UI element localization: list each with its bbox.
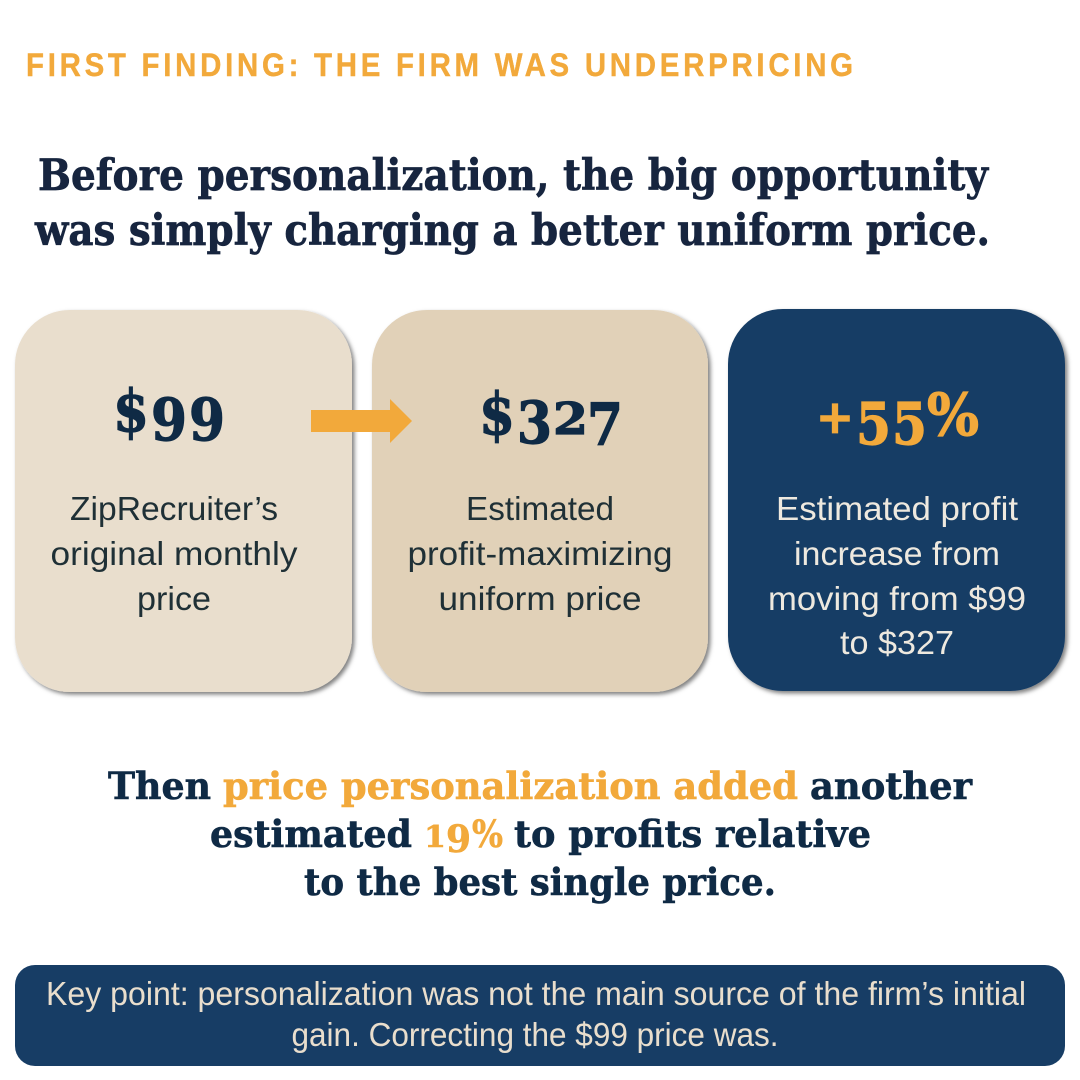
panel: profit increase xyxy=(728,309,1065,691)
key point text: Key point: personalization was not the main source of the firm’s initial xyxy=(46,975,1026,1012)
title: FIRST FINDING: THE FIRM WAS UNDERPRICING xyxy=(26,47,853,83)
heading xyxy=(34,151,990,256)
stat: +55% xyxy=(816,381,979,458)
personalization statement: another xyxy=(810,764,972,808)
description: profit-maximizing price xyxy=(408,490,672,617)
description: profit-maximizing price: profit-maximizing xyxy=(408,535,672,572)
stat: $99: $ xyxy=(113,377,149,445)
personalization statement: 1 xyxy=(424,820,446,855)
stat: $99: 9 xyxy=(189,386,225,454)
stat: +55%: 5 xyxy=(892,390,927,458)
description: original price: original monthly xyxy=(50,535,298,572)
description: profit increase: Estimated profit xyxy=(776,490,1018,527)
personalization statement: % xyxy=(472,812,503,856)
heading: was simply charging a better uniform price. xyxy=(34,206,990,256)
description: original price: price xyxy=(137,580,211,617)
heading: Before personalization, the big opportunity xyxy=(38,151,990,201)
personalization statement: price personalization added xyxy=(223,764,798,808)
personalization statement xyxy=(108,764,972,904)
personalization statement: to profits relative xyxy=(514,812,871,856)
key point text: gain. Correcting the $99 price was. xyxy=(292,1016,778,1053)
description: profit increase: increase from xyxy=(794,535,1000,572)
personalization statement: to the best single price. xyxy=(304,860,776,904)
description: profit increase: moving from $99 xyxy=(768,580,1026,617)
stat: +55%: % xyxy=(927,381,979,449)
key point banner xyxy=(15,965,1065,1066)
panel: original price xyxy=(15,310,352,692)
personalization statement: estimated xyxy=(210,812,412,856)
stat: $327: 7 xyxy=(587,391,623,459)
personalization statement: 9 xyxy=(446,817,471,861)
stat: +55%: 5 xyxy=(856,390,891,458)
stat: $99 xyxy=(113,377,225,454)
arrow xyxy=(311,399,412,443)
stat: +55%: + xyxy=(816,390,854,444)
stat: $327 xyxy=(479,380,623,459)
stat: $327: 2 xyxy=(553,394,588,445)
description: profit increase xyxy=(768,490,1026,661)
description: profit increase: to $327 xyxy=(840,624,954,661)
stat: $327: $ xyxy=(479,380,515,448)
description: original price xyxy=(50,490,298,617)
panel: profit-maximizing price xyxy=(372,310,708,692)
description: profit-maximizing price: Estimated xyxy=(466,490,614,527)
description: original price: ZipRecruiter’s xyxy=(70,490,278,527)
stat: $327: 3 xyxy=(517,389,552,457)
stat: $99: 9 xyxy=(151,386,187,454)
personalization statement: Then xyxy=(108,764,211,808)
description: profit-maximizing price: uniform price xyxy=(438,580,642,617)
key point text xyxy=(46,975,1026,1053)
